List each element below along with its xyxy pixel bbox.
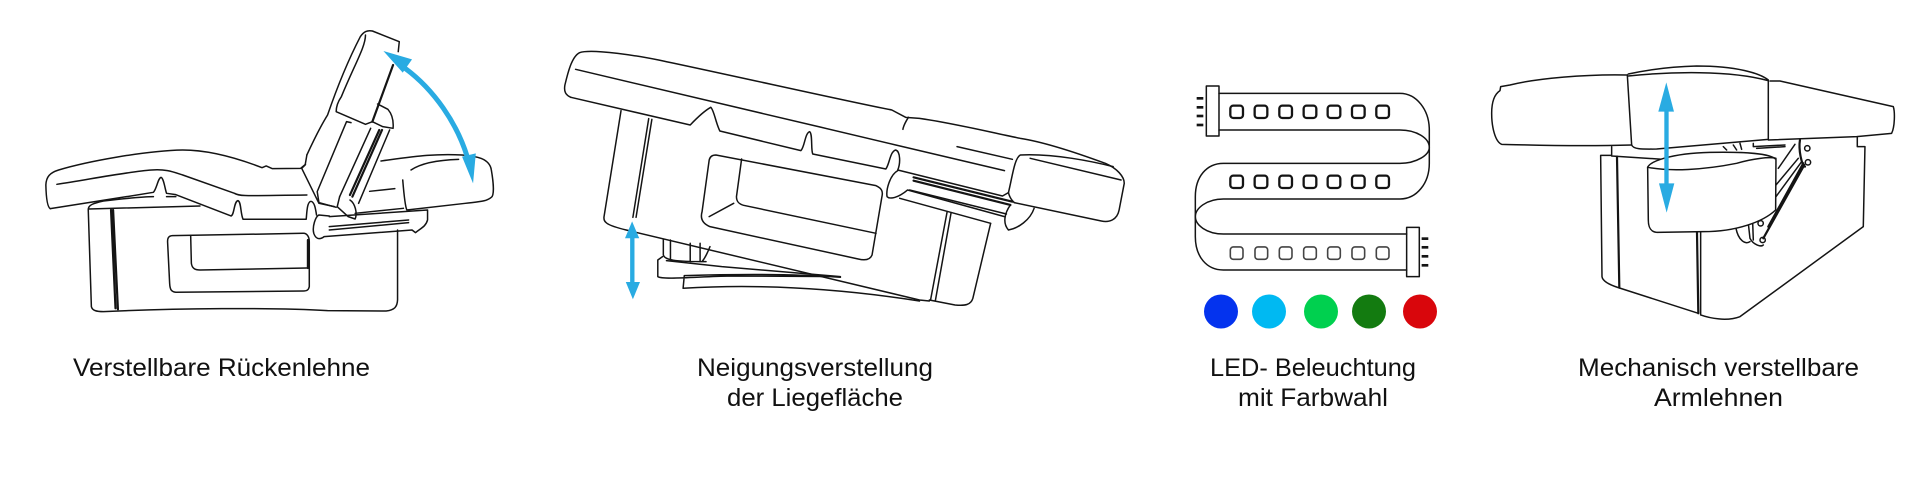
illustration: lounger front view with armrest: [1492, 66, 1894, 319]
caption: armrests: [1578, 354, 1859, 412]
illustration: LED strip: [1195, 86, 1429, 277]
caption: tilt: der Liegefläche: [727, 384, 903, 412]
panel: adjustable backrest: [46, 31, 493, 382]
icon: connector pins: [1197, 97, 1428, 267]
caption: tilt: Neigungsverstellung: [697, 354, 933, 382]
caption: backrest: Verstellbare Rückenlehne: [73, 354, 370, 382]
caption: armrests: Armlehnen: [1654, 384, 1783, 412]
caption: tilt: [697, 354, 933, 412]
illustration: lounger with raised backrest: [46, 31, 493, 312]
arrow: armrest up/down: [1658, 82, 1674, 213]
arrow: backrest swing: [383, 51, 476, 183]
caption: LED: [1210, 354, 1416, 412]
caption: armrests: Mechanisch verstellbare: [1578, 354, 1859, 382]
legend: colour choices: [1204, 294, 1437, 328]
illustration: lounger tilted: [565, 51, 1124, 305]
panel: surface tilt: [565, 51, 1124, 412]
panel: LED lighting: [1195, 86, 1437, 412]
panel: adjustable armrests: [1492, 66, 1894, 412]
caption: LED: LED- Beleuchtung: [1210, 354, 1416, 382]
arrow: tilt up/down: [625, 221, 640, 299]
caption: LED: mit Farbwahl: [1238, 384, 1388, 412]
